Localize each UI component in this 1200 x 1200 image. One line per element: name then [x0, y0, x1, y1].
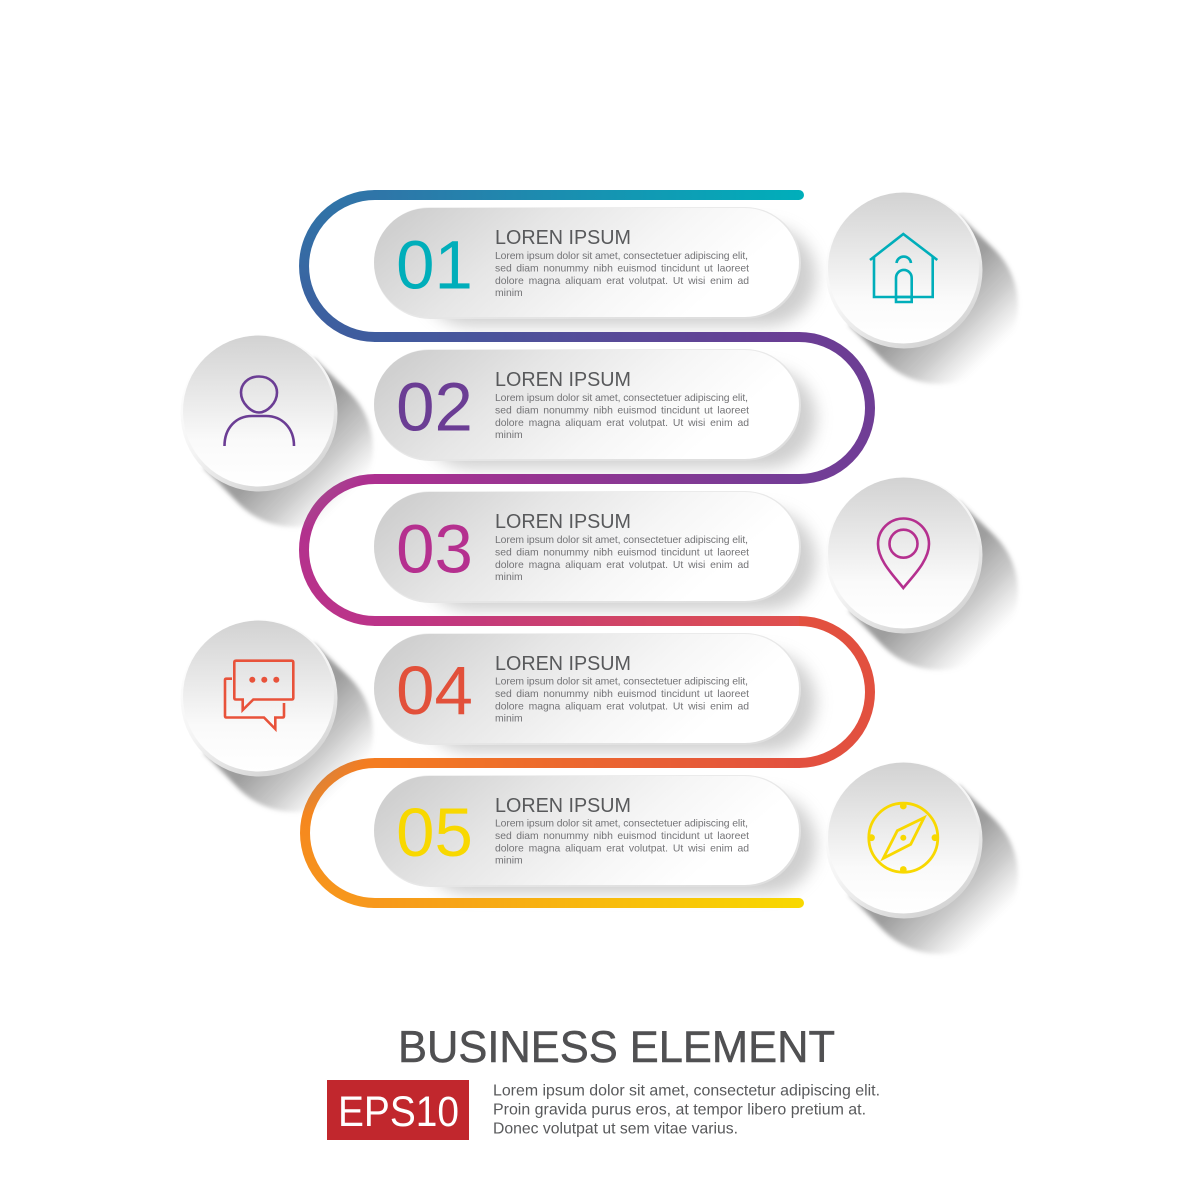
panel: step 05 — [374, 775, 801, 887]
heading 01: LOREN IPSUM — [495, 227, 631, 249]
text block 04: sed diam nonummy nibh euismod tincidunt ut laoreet — [495, 689, 749, 700]
footer description: Lorem ipsum dolor sit amet, consectetur adipiscing elit. — [493, 1082, 880, 1100]
panel: step 02 — [374, 349, 801, 461]
text block 05 — [495, 818, 749, 866]
text block 01: minim — [495, 288, 523, 299]
circle badge: person — [180, 334, 373, 527]
footer description: Proin gravida purus eros, at tempor libero pretium at. — [493, 1102, 866, 1118]
number 04: 04 — [396, 652, 473, 729]
EPS10 badge: EPS10 — [338, 1088, 459, 1136]
text block 01: dolore magna aliquam erat volutpat. Ut wisi enim ad — [495, 276, 749, 287]
panel: step 04 — [374, 633, 801, 745]
panel shadows — [420, 226, 816, 894]
text block 05: dolore magna aliquam erat volutpat. Ut wisi enim ad — [495, 844, 749, 854]
circle badge: home — [826, 192, 1018, 384]
title: BUSINESS ELEMENT — [398, 1023, 835, 1072]
panel: step 01 — [374, 207, 801, 319]
icon: person — [224, 376, 294, 446]
text block 02: dolore magna aliquam erat volutpat. Ut wisi enim ad — [495, 418, 749, 429]
icon: house — [870, 234, 937, 302]
text block 03: Lorem ipsum dolor sit amet, consectetuer adipiscing elit, — [495, 535, 748, 546]
circle badge: compass — [826, 762, 1018, 954]
icon: chat bubbles — [225, 661, 293, 729]
number 02: 02 — [396, 368, 473, 446]
text block 02 — [495, 393, 749, 441]
text block 03 — [495, 535, 749, 583]
text block 05: sed diam nonummy nibh euismod tincidunt ut laoreet — [495, 831, 749, 842]
text block 03: minim — [495, 572, 523, 583]
text block 03: dolore magna aliquam erat volutpat. Ut wisi enim ad — [495, 560, 749, 571]
heading 04: LOREN IPSUM — [495, 653, 631, 675]
text block 04: dolore magna aliquam erat volutpat. Ut wisi enim ad — [495, 702, 749, 712]
circle badge: chat — [180, 620, 373, 812]
text block 02: sed diam nonummy nibh euismod tincidunt ut laoreet — [495, 406, 749, 416]
text block 02: minim — [495, 430, 523, 441]
heading 05: LOREN IPSUM — [495, 795, 631, 817]
heading 03: LOREN IPSUM — [495, 511, 631, 533]
icon: compass — [868, 803, 938, 873]
panel: step 03 — [374, 491, 801, 603]
number 05: 05 — [396, 794, 473, 871]
icon: map pin — [878, 518, 929, 588]
text block 03: sed diam nonummy nibh euismod tincidunt ut laoreet — [495, 548, 749, 558]
number 03: 03 — [396, 510, 473, 588]
heading 02: LOREN IPSUM — [495, 369, 631, 391]
text block 02: Lorem ipsum dolor sit amet, consectetuer adipiscing elit, — [495, 393, 748, 404]
number 01: 01 — [396, 226, 473, 304]
text block 04 — [495, 676, 749, 724]
text block 05: Lorem ipsum dolor sit amet, consectetuer adipiscing elit, — [495, 818, 748, 830]
text block 04: Lorem ipsum dolor sit amet, consectetuer adipiscing elit, — [495, 676, 748, 688]
circle badge: location — [826, 476, 1018, 670]
text block 01 — [495, 251, 749, 299]
text block 04: minim — [495, 714, 523, 724]
text block 05: minim — [495, 856, 523, 866]
footer description: Donec volutpat ut sem vitae varius. — [493, 1120, 738, 1138]
text block 01: sed diam nonummy nibh euismod tincidunt ut laoreet — [495, 264, 749, 274]
text block 01: Lorem ipsum dolor sit amet, consectetuer adipiscing elit, — [495, 251, 748, 262]
gradient ribbon connector — [304, 195, 870, 903]
footer description — [493, 1082, 880, 1138]
